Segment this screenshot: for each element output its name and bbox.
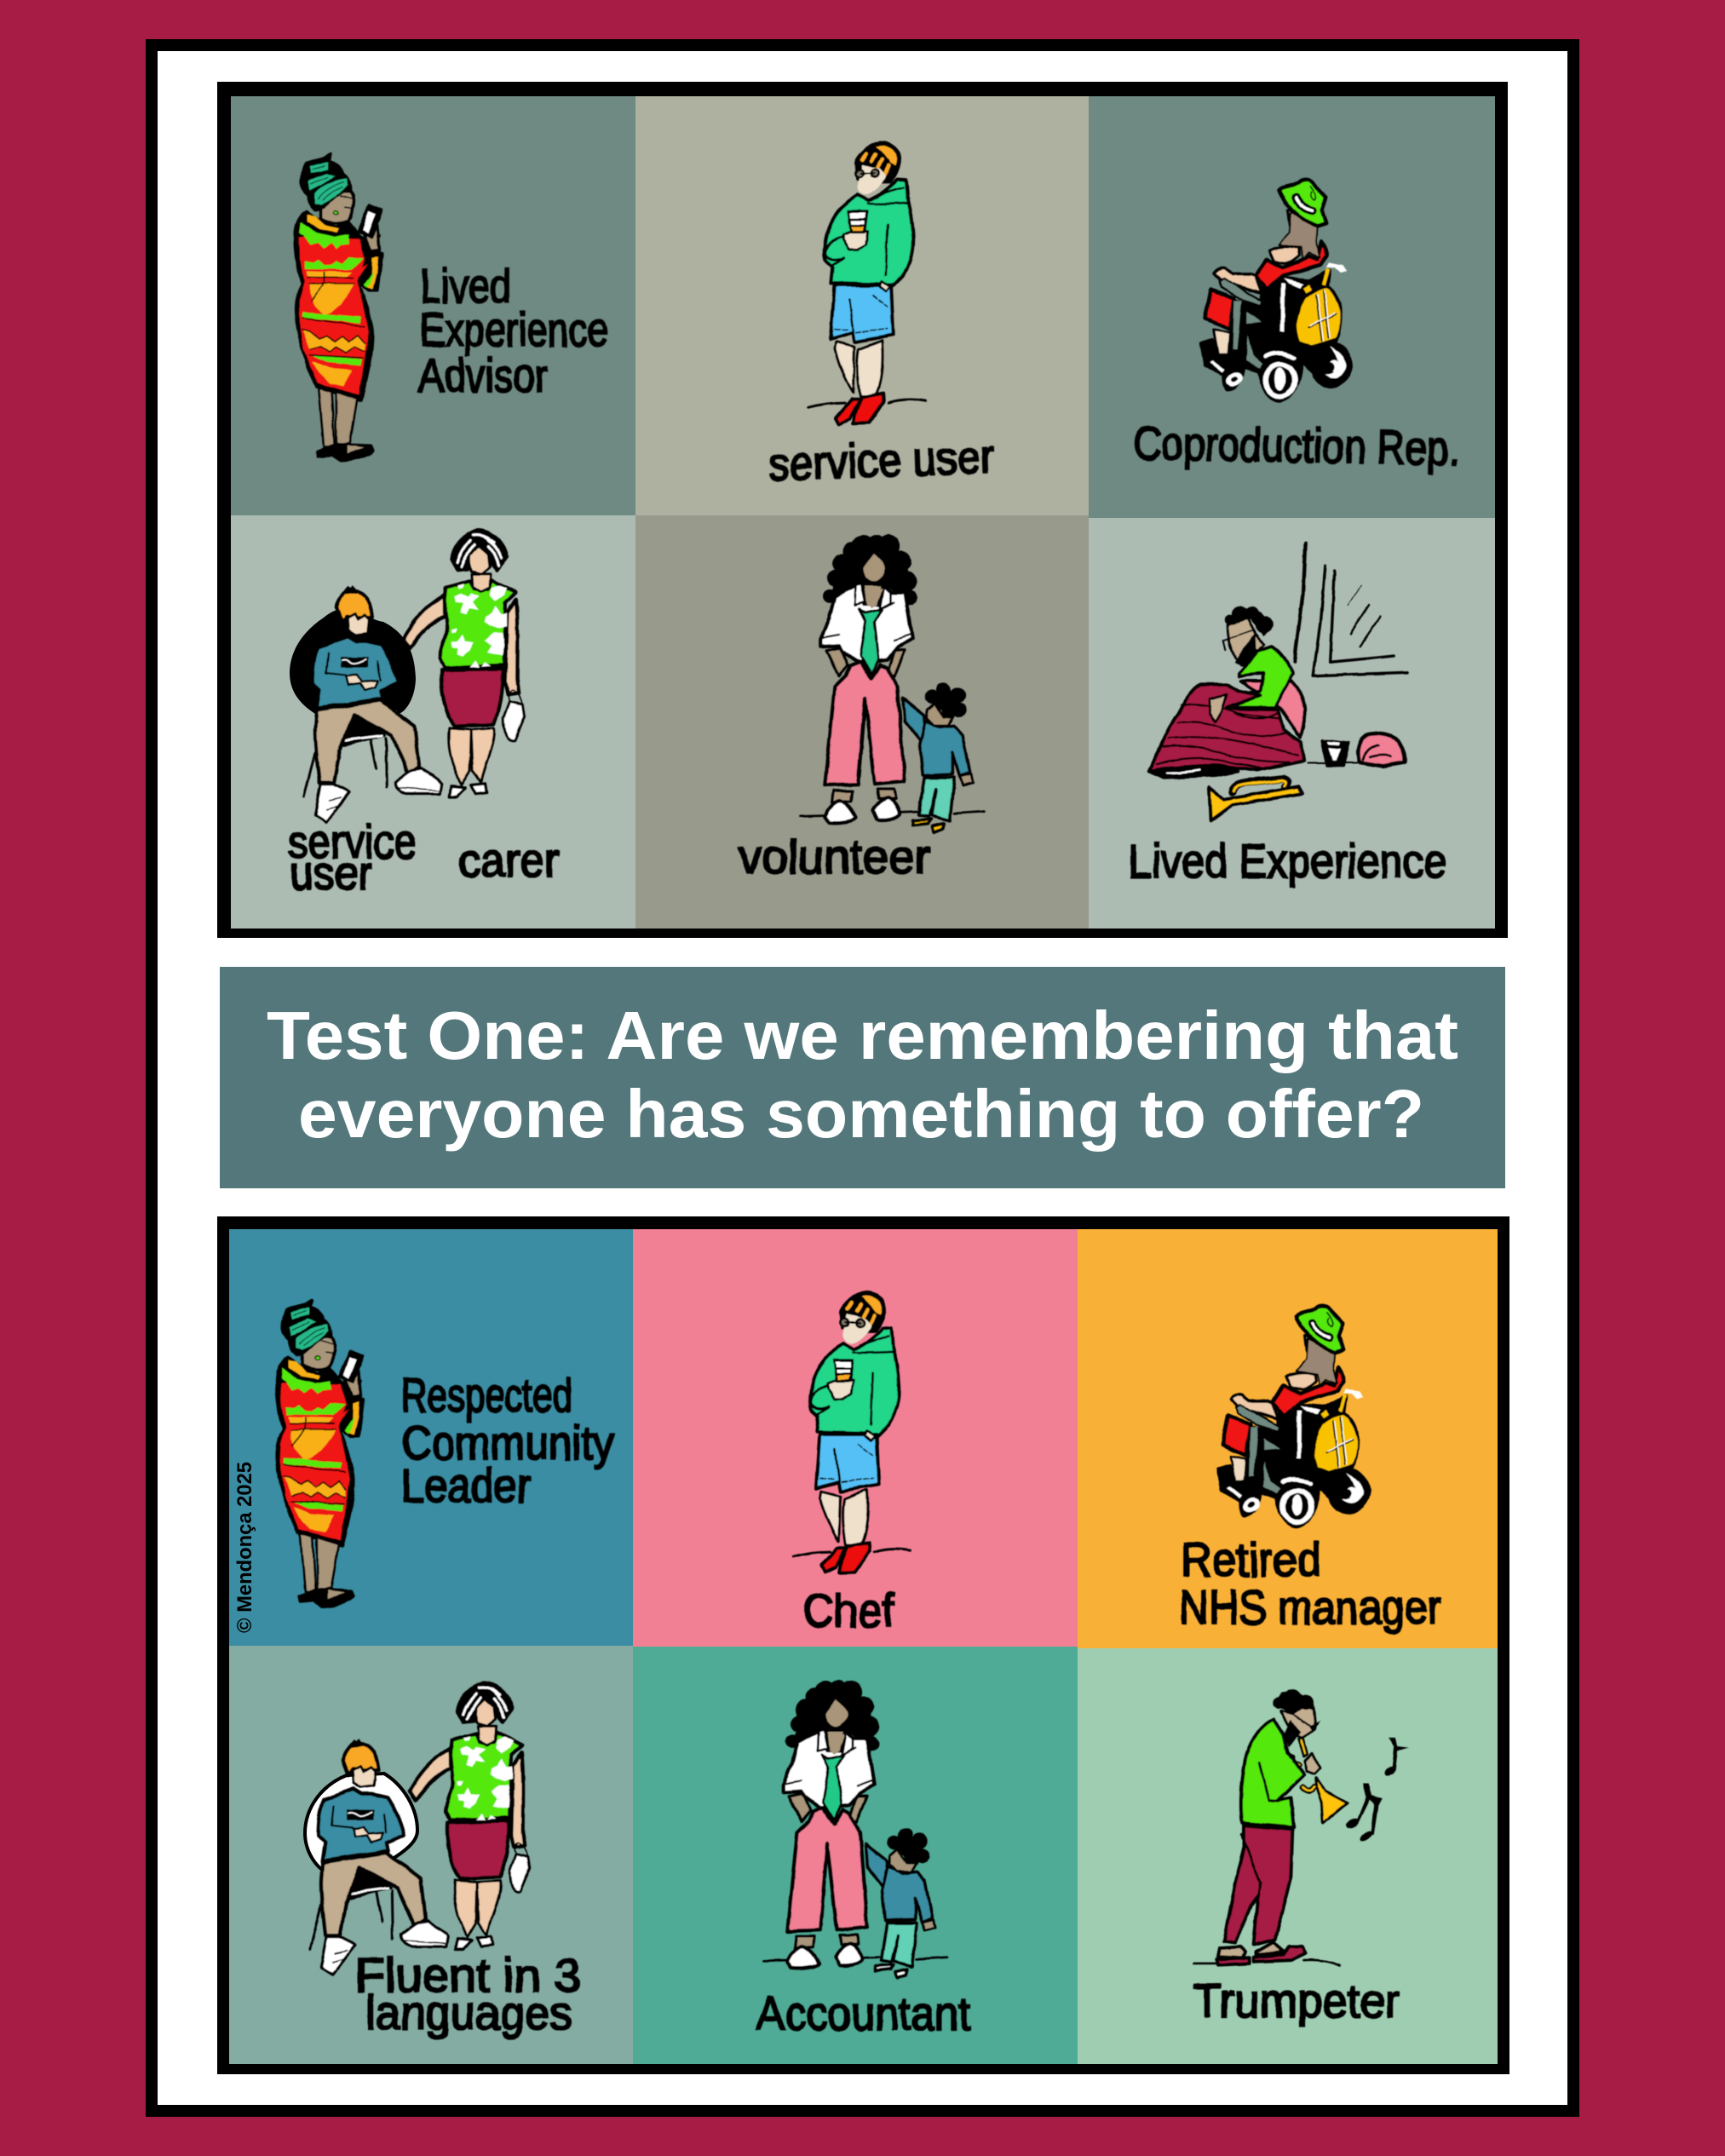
figure: person in hoodie with cup	[808, 143, 925, 423]
label: Fluent in 3 languages: Fluent in 3	[355, 1948, 581, 2002]
label: Respected Community Leader	[401, 1368, 614, 1512]
panel: accountant	[633, 1647, 1078, 2064]
panel: service user and carer	[231, 515, 635, 929]
figure: woman and child	[763, 1681, 947, 1978]
label: service user	[288, 814, 417, 900]
panel: coproduction rep	[1089, 96, 1495, 518]
label: Retired NHS manager: NHS manager	[1179, 1580, 1441, 1634]
label: carer: carer	[458, 833, 560, 887]
panel: lived experience advisor	[231, 96, 635, 515]
figure: woman in wheelchair	[1219, 1306, 1369, 1526]
figure: seated man and standing carer	[304, 531, 524, 822]
figure: woman and child	[801, 535, 985, 832]
label: service user: service	[288, 814, 417, 868]
label: Fluent in 3 languages	[355, 1948, 581, 2039]
panel: retired NHS manager	[1078, 1229, 1498, 1648]
label: Lived Experience Advisor: Advisor	[418, 348, 548, 402]
label: Lived Experience Advisor: Lived	[420, 259, 511, 313]
panel: service user	[635, 96, 1089, 515]
label: Lived Experience Advisor: Experience	[420, 302, 608, 356]
panel: chef	[633, 1229, 1078, 1647]
label: Accountant: Accountant	[756, 1986, 970, 2040]
label: Lived Experience Advisor	[418, 259, 608, 402]
label: Respected Community Leader: Leader	[401, 1458, 531, 1512]
panel: top grid of roles	[217, 82, 1508, 938]
label: Chef: Chef	[802, 1584, 894, 1637]
figure: man playing trumpet with music notes	[1194, 1689, 1409, 1966]
label: Retired NHS manager: Retired	[1181, 1532, 1321, 1586]
panel: bottom grid of roles	[217, 1216, 1509, 2074]
figure: woman with headwrap and phone	[296, 154, 382, 461]
copyright: © Mendonça 2025	[233, 1462, 256, 1633]
chair back	[290, 609, 416, 714]
banner heading: Test One: Are we remembering that	[267, 998, 1458, 1073]
panel: lived experience	[1089, 518, 1495, 929]
panel: volunteer	[635, 515, 1089, 929]
label: Respected Community Leader: Community	[401, 1416, 614, 1469]
label: Fluent in 3 languages: languages	[365, 1986, 572, 2039]
label: service user: service user	[768, 429, 995, 491]
label: Lived Experience: Lived Experience	[1129, 834, 1446, 888]
label: Respected Community Leader: Respected	[401, 1368, 572, 1422]
panel: trumpeter	[1078, 1648, 1498, 2064]
panel: respected community leader	[229, 1229, 633, 1646]
figure: seated man and standing woman	[310, 1683, 530, 1975]
banner heading: everyone has something to offer?	[298, 1076, 1424, 1152]
label: volunteer: volunteer	[739, 830, 930, 883]
label: Retired NHS manager	[1179, 1532, 1441, 1634]
panel: fluent in 3 languages	[229, 1646, 633, 2064]
figure: woman with headwrap and phone	[277, 1300, 363, 1607]
chair back	[305, 1774, 417, 1870]
label: Coproduction Rep.: Coproduction Rep.	[1133, 416, 1460, 475]
label: service user: user	[290, 846, 372, 900]
outer frame	[152, 45, 1573, 2111]
figure: person in hoodie with cup	[793, 1292, 911, 1572]
figure: woman in wheelchair	[1202, 180, 1352, 400]
label: Trumpeter: Trumpeter	[1193, 1974, 1400, 2027]
banner heading	[220, 967, 1505, 1188]
figure: man seated by wall with blanket and trumpet	[1149, 543, 1407, 820]
